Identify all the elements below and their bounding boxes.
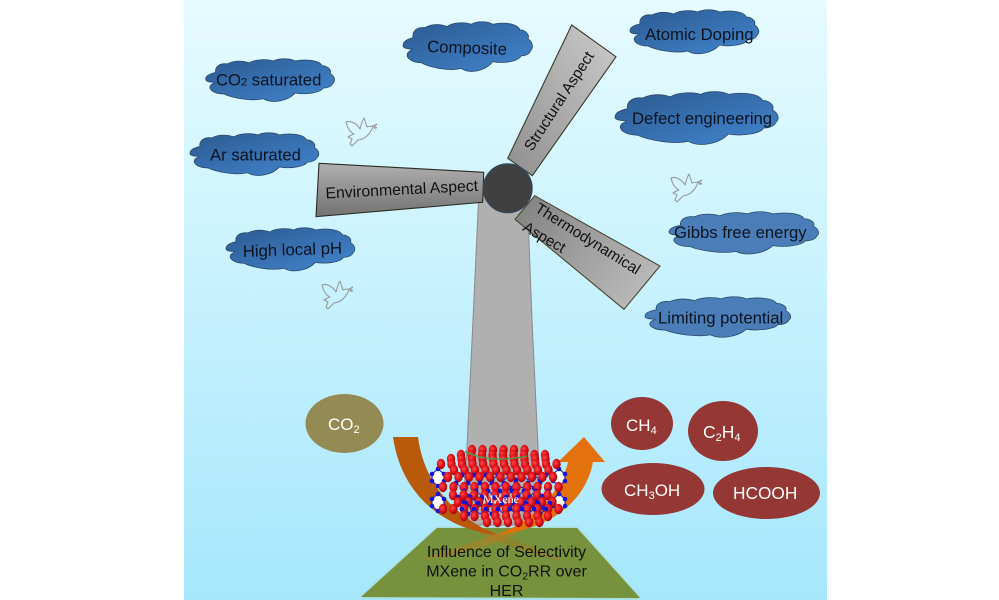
blade: Thermodynamical Aspect: Thermodynamical [532, 200, 643, 278]
product: CH3OH: 3 [649, 490, 655, 502]
reactant: CO2: CO [328, 415, 354, 434]
cloud: Atomic Doping [630, 10, 759, 54]
product: CH3OH [602, 463, 704, 515]
cloud: Atomic Doping: Atomic Doping [645, 25, 754, 44]
product: C2H4: 4 [734, 432, 741, 444]
sky background panel [184, 0, 827, 600]
turbine hub [483, 164, 532, 213]
cloud: Limiting potential [645, 297, 791, 337]
blade: Environmental Aspect: Environmental Aspect [325, 178, 479, 202]
ground: green trapezoid base [361, 528, 640, 598]
product: CH4 [611, 397, 673, 450]
turbine tower [462, 190, 542, 525]
product: CH4: CH [626, 416, 651, 435]
product: C2H4: 2 [716, 432, 722, 444]
blade: Structural Aspect [508, 25, 616, 176]
cloud: Defect engineering: Defect engineering [632, 109, 772, 128]
cloud: CO2 saturated [206, 59, 334, 101]
caption: influence of selectivity [426, 544, 587, 600]
cloud: Composite: Composite [427, 37, 507, 59]
dove 2 [322, 281, 353, 309]
caption: influence of selectivity: Influence of Selectivity [427, 544, 586, 561]
product: CH3OH: OH [655, 481, 680, 500]
caption: influence of selectivity: MXene in CO [426, 564, 522, 580]
arrow: CO2 feed curving into MXene [393, 437, 567, 562]
cloud: Gibbs free energy: Gibbs free energy [674, 223, 807, 242]
reactant: CO2 [306, 394, 384, 453]
blade: Structural Aspect: Structural Aspect [521, 48, 598, 154]
dove 1 [346, 118, 377, 146]
cloud: Ar saturated: Ar saturated [210, 146, 301, 164]
cloud: Limiting potential: Limiting potential [658, 308, 783, 328]
product: C2H4 [688, 401, 758, 461]
caption: influence of selectivity: 2 [522, 570, 528, 582]
product: CH4: 4 [651, 425, 657, 437]
cloud: Composite [403, 22, 532, 71]
cloud: CO2 saturated: CO2 saturated [216, 70, 321, 90]
reactant: CO2: 2 [354, 424, 360, 436]
MXene label: MXene [483, 492, 519, 506]
dove 3 [671, 174, 702, 202]
caption: influence of selectivity: HER [490, 583, 523, 600]
product: C2H4: H [722, 422, 734, 442]
cloud: Ar saturated [190, 133, 319, 175]
product: C2H4: C [703, 422, 716, 442]
cloud: High local pH [226, 228, 355, 271]
blade: Thermodynamical Aspect: Aspect [520, 219, 569, 257]
cloud: Defect engineering [615, 92, 778, 144]
blade: Thermodynamical Aspect [515, 196, 660, 309]
cloud: High local pH: High local pH [242, 239, 342, 261]
MXene crystal structure [430, 445, 567, 527]
product: HCOOH [713, 467, 820, 519]
product: CH3OH: CH [624, 481, 649, 500]
caption: influence of selectivity: RR over [528, 564, 587, 580]
product: HCOOH: HCOOH [733, 483, 797, 503]
blade: Environmental Aspect [316, 163, 484, 217]
cloud: Gibbs free energy [669, 212, 819, 254]
arrow: products leaving MXene [420, 437, 605, 560]
